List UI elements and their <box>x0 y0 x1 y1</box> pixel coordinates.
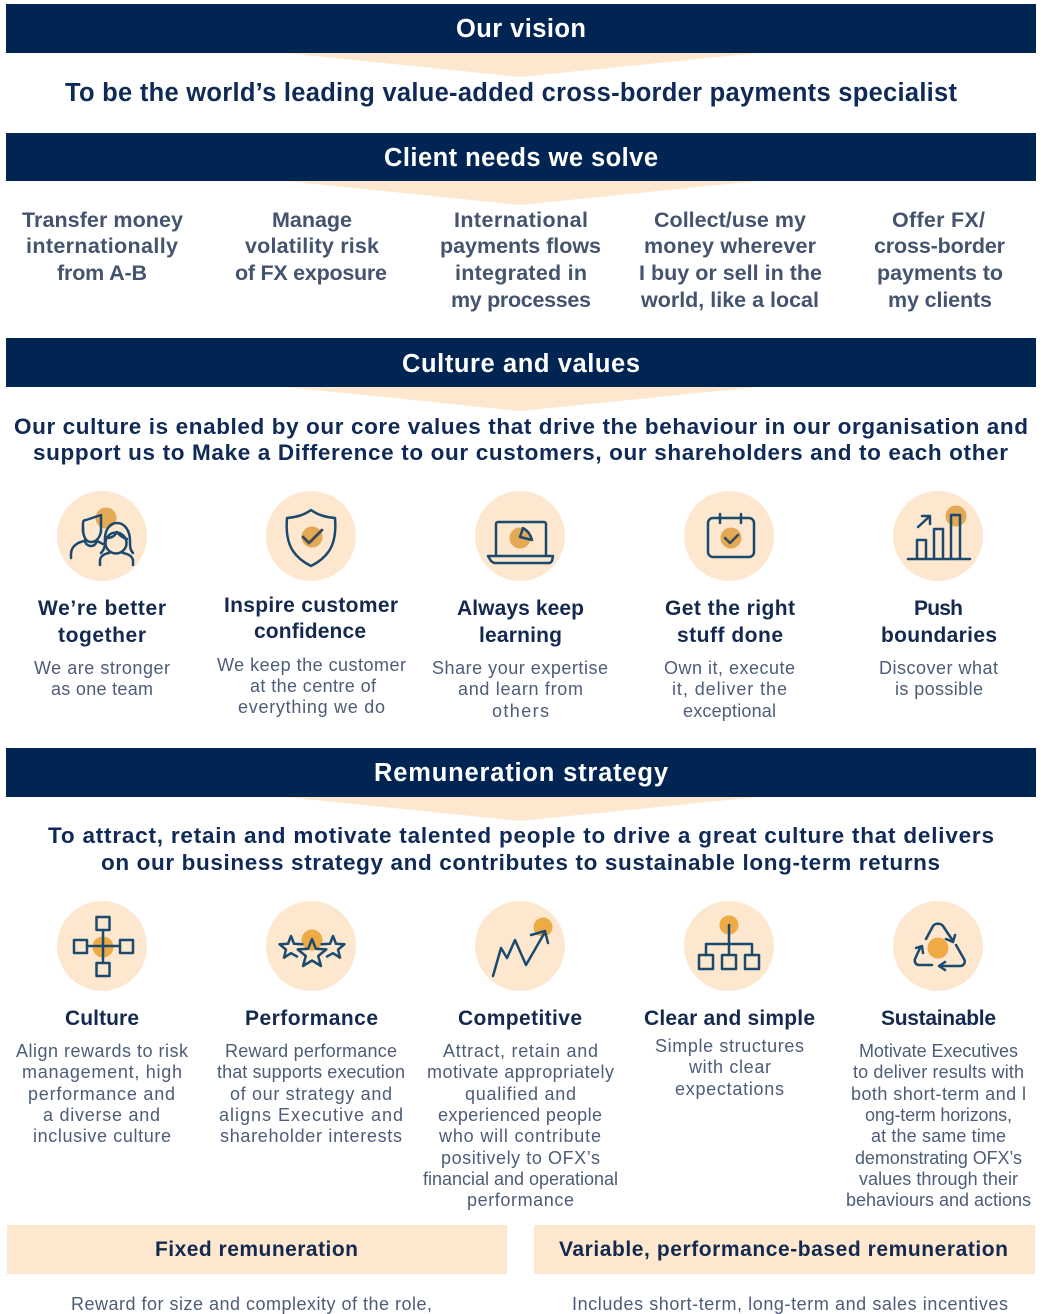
client need: transfer money: from A-B <box>57 261 147 285</box>
culture statement: Our culture is enabled by our core values that drive the behaviour in our organisation and <box>14 414 1028 439</box>
icon: rising line with arrow <box>475 901 565 991</box>
value: get the right stuff done: Own it, execute <box>664 658 795 678</box>
value: better together <box>34 491 170 699</box>
principle: sustainable: ong-term horizons, <box>865 1105 1012 1125</box>
section: remuneration strategy: Remuneration strategy <box>374 759 669 787</box>
panel: variable remuneration: Variable, performance-based remuneration <box>559 1238 1008 1261</box>
principle: performance: of our strategy and <box>230 1084 392 1104</box>
section: our vision <box>6 4 1036 107</box>
section: our vision: To be the world’s leading value-added cross-border payments specialist <box>65 79 958 107</box>
client need: manage volatility: of FX exposure <box>235 261 387 285</box>
value: inspire customer confidence: confidence <box>254 620 366 643</box>
icon: shield with check <box>266 491 356 581</box>
value: get the right stuff done: it, deliver the <box>672 679 787 699</box>
value: inspire customer confidence: at the centre of <box>250 676 377 696</box>
client need: offer FX to clients: Offer FX/ <box>892 208 985 232</box>
principle: performance: shareholder interests <box>220 1126 402 1146</box>
value: push boundaries: boundaries <box>881 624 997 647</box>
value: inspire customer confidence: Inspire customer <box>224 594 398 617</box>
client need: collect and use money: Collect/use my <box>654 208 806 232</box>
principle: clear and simple: Simple structures <box>655 1036 804 1056</box>
principle: competitive: positively to OFX’s <box>441 1148 600 1168</box>
principle: culture: Culture <box>65 1007 139 1030</box>
value: push boundaries: is possible <box>895 679 983 699</box>
principle: culture: management, high <box>22 1062 182 1082</box>
principle: sustainable: behaviours and actions <box>846 1190 1031 1210</box>
client need: collect and use money <box>639 208 822 312</box>
principle: competitive: qualified and <box>465 1084 576 1104</box>
section: remuneration strategy <box>6 748 1036 1210</box>
icon: connected squares <box>57 901 147 991</box>
section: client needs we solve <box>6 133 1036 312</box>
value: always keep learning <box>432 491 608 721</box>
client need: international payments flows: integrated in <box>455 261 587 285</box>
value: better together: together <box>58 624 146 647</box>
client need: transfer money <box>22 208 183 285</box>
remuneration statement <box>48 823 994 875</box>
value: get the right stuff done: exceptional <box>683 701 776 721</box>
icon: organisation chart <box>684 901 774 991</box>
value: always keep learning: learning <box>479 624 562 647</box>
principle: sustainable: to deliver results with <box>853 1062 1024 1082</box>
principle: performance: Performance <box>245 1007 378 1030</box>
value: get the right stuff done <box>664 491 795 721</box>
principle: sustainable: values through their <box>859 1169 1018 1189</box>
client need: manage volatility: volatility risk <box>245 234 379 258</box>
principle: competitive: motivate appropriately <box>427 1062 614 1082</box>
panel: variable remuneration <box>534 1225 1035 1314</box>
client need: offer FX to clients: my clients <box>888 288 992 312</box>
principle: clear and simple <box>644 901 815 1099</box>
client need: collect and use money: money wherever <box>644 234 817 258</box>
remuneration statement: on our business strategy and contributes to sustainable long-term returns <box>101 850 940 875</box>
principle: sustainable: both short-term and l <box>851 1084 1026 1104</box>
principle: competitive: financial and operational <box>423 1169 618 1189</box>
client need: offer FX to clients: cross-border <box>874 234 1006 258</box>
principle: competitive: performance <box>467 1190 574 1210</box>
value: inspire customer confidence: We keep the customer <box>217 655 406 675</box>
principle: clear and simple: expectations <box>675 1079 784 1099</box>
principle: clear and simple: Clear and simple <box>644 1007 815 1030</box>
value: inspire customer confidence <box>217 491 406 717</box>
client need: international payments flows: my processes <box>451 288 591 312</box>
value: better together: as one team <box>51 679 153 699</box>
client need: international payments flows: payments flows <box>440 234 601 258</box>
principle: performance <box>217 901 405 1146</box>
value: push boundaries: Push <box>914 597 963 620</box>
client need: manage volatility: Manage <box>272 208 352 232</box>
value: always keep learning: others <box>492 701 549 721</box>
panel: fixed remuneration <box>7 1225 507 1314</box>
client need: international payments flows: International <box>454 208 588 232</box>
section: culture and values: Culture and values <box>402 350 640 378</box>
value: always keep learning: Always keep <box>457 597 584 620</box>
value: inspire customer confidence: everything we do <box>238 697 385 717</box>
culture statement <box>14 414 1028 465</box>
principle: culture: Align rewards to risk <box>16 1041 189 1061</box>
client need: offer FX to clients <box>874 208 1006 312</box>
client need: manage volatility <box>235 208 387 285</box>
client need: transfer money: internationally <box>26 234 178 258</box>
value: better together: We’re better <box>38 597 166 620</box>
principle: clear and simple: with clear <box>688 1057 771 1077</box>
icon: recycling arrows <box>893 901 983 991</box>
client need: transfer money: Transfer money <box>22 208 183 232</box>
icon: calendar with check <box>684 491 774 581</box>
principle: competitive: who will contribute <box>438 1126 601 1146</box>
principle: competitive: Attract, retain and <box>443 1041 598 1061</box>
icon: laptop with pie chart <box>475 491 565 581</box>
principle: culture: inclusive culture <box>33 1126 171 1146</box>
client need: offer FX to clients: payments to <box>877 261 1003 285</box>
panel: fixed remuneration: Fixed remuneration <box>155 1238 358 1261</box>
principle: performance: Reward performance <box>225 1041 397 1061</box>
icon: bar chart with arrow <box>893 491 983 581</box>
section: our vision: Our vision <box>456 15 586 43</box>
value: get the right stuff done: Get the right <box>665 597 795 620</box>
principle: culture: performance and <box>28 1084 175 1104</box>
value: push boundaries <box>879 491 998 699</box>
culture statement: support us to Make a Difference to our customers, our shareholders and to each other <box>33 440 1008 465</box>
value: push boundaries: Discover what <box>879 658 998 678</box>
client need: collect and use money: world, like a local <box>640 288 819 312</box>
principle: performance: that supports execution <box>217 1062 405 1082</box>
principle: sustainable: Sustainable <box>881 1007 996 1030</box>
section: client needs we solve: Client needs we solve <box>384 144 658 172</box>
principle: competitive: Competitive <box>458 1007 582 1030</box>
value: always keep learning: Share your expertise <box>432 658 608 678</box>
section: culture and values <box>6 338 1036 721</box>
value: always keep learning: and learn from <box>458 679 583 699</box>
panel: fixed remuneration: Reward for size and complexity of the role, <box>71 1294 432 1314</box>
principle: performance: aligns Executive and <box>219 1105 403 1125</box>
principle: sustainable <box>846 901 1031 1210</box>
principle: sustainable: Motivate Executives <box>859 1041 1018 1061</box>
icon: three stars <box>266 901 356 991</box>
principle: competitive: experienced people <box>438 1105 602 1125</box>
client need: international payments flows <box>440 208 601 312</box>
principle: competitive <box>423 901 618 1210</box>
principle: sustainable: demonstrating OFX’s <box>855 1148 1022 1168</box>
panel: variable remuneration: Includes short-term, long-term and sales incentives <box>572 1294 1008 1314</box>
value: get the right stuff done: stuff done <box>677 624 783 647</box>
principle: sustainable: at the same time <box>871 1126 1006 1146</box>
client need: collect and use money: I buy or sell in the <box>639 261 822 285</box>
principle: culture <box>16 901 189 1146</box>
value: better together: We are stronger <box>34 658 170 678</box>
icon: two people <box>57 491 147 581</box>
remuneration statement: To attract, retain and motivate talented people to drive a great culture that delivers <box>48 823 994 848</box>
principle: culture: a diverse and <box>43 1105 160 1125</box>
